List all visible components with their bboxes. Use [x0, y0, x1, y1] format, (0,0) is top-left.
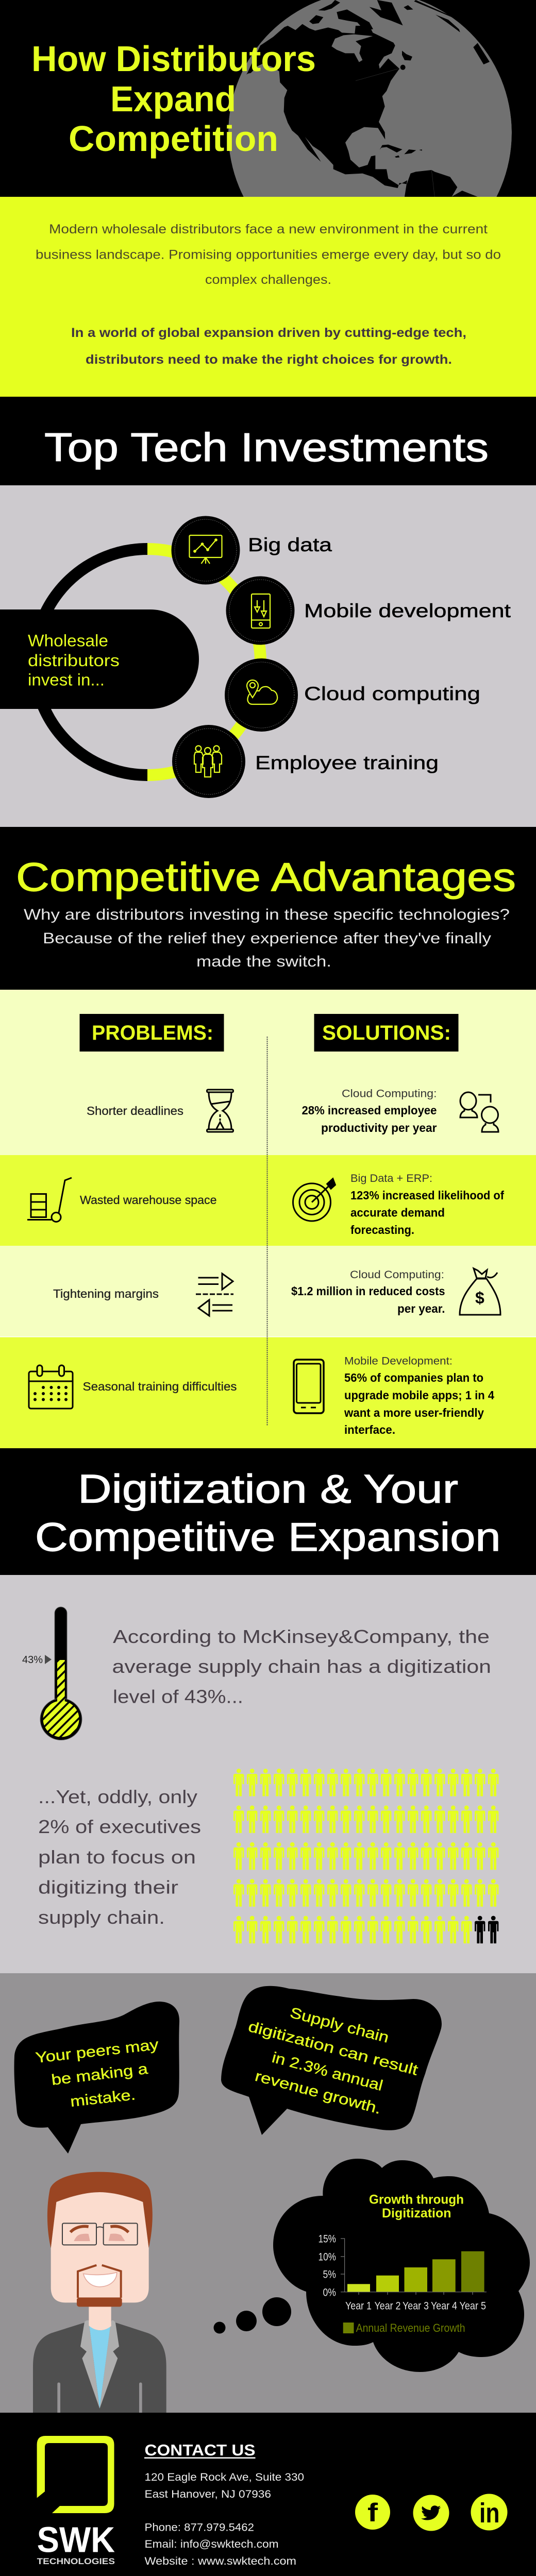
- icon: facebook: [355, 2495, 390, 2530]
- pictogram: 2 of 100 executives: [233, 1769, 499, 1944]
- chart title: Digitization: [382, 2206, 451, 2221]
- problem: wasted warehouse space: Wasted warehouse space: [80, 1193, 216, 1207]
- thought cloud with chart: [213, 2159, 530, 2372]
- character: man with glasses: [33, 2172, 166, 2413]
- title: How Distributors: [31, 39, 316, 79]
- panel: digitization stats: [0, 1575, 536, 1973]
- heading: Digitization and Your Competitive Expansion: Digitization & Your: [78, 1466, 458, 1512]
- speech bubble: revenue growth: digitization can result: [246, 2019, 420, 2079]
- icon: facebook: f: [367, 2498, 378, 2527]
- problem: tightening margins: Tightening margins: [53, 1287, 159, 1300]
- title: Expand: [110, 79, 236, 119]
- bar chart: annual revenue growth: 5%: [323, 2269, 336, 2281]
- center pill: Wholesale: [28, 632, 108, 650]
- badge: problems: [79, 1014, 224, 1052]
- contact details: Email: info@swktech.com: [144, 2538, 278, 2550]
- item: cloud computing: Cloud computing: [304, 683, 480, 704]
- intro emphasis: In a world of global expansion driven by cutting-edge tech,: [71, 326, 466, 340]
- solution: employee productivity: 28% increased employee: [302, 1104, 437, 1117]
- panel: problems and solutions: [0, 990, 536, 1448]
- icon: hand truck: [27, 1178, 72, 1222]
- problem: shorter deadlines: [87, 1090, 233, 1132]
- text: executives focus: [38, 1786, 201, 1928]
- icon: people exchange: [460, 1092, 498, 1132]
- subtitle: [24, 906, 510, 970]
- heading: Competitive Advantages: Competitive Advantages: [16, 854, 516, 900]
- subtitle: made the switch.: [196, 953, 331, 970]
- intro emphasis: distributors need to make the right choices for growth.: [86, 352, 452, 367]
- icon: linkedin: [471, 2494, 507, 2531]
- solution: demand forecasting: accurate demand: [350, 1206, 445, 1219]
- contact details: [144, 2471, 304, 2567]
- bar chart: annual revenue growth: 15%: [319, 2233, 336, 2245]
- speech bubble: revenue growth: revenue growth.: [253, 2068, 383, 2117]
- icon: linkedin: in: [479, 2498, 500, 2529]
- speech bubble: revenue growth: [221, 1986, 442, 2135]
- heading: Digitization and Your Competitive Expansion: [0, 1448, 536, 1575]
- text: executives focus: digitizing their: [38, 1876, 178, 1898]
- subtitle: Because of the relief they experience after they've finally: [43, 930, 491, 947]
- solution: reduced costs: $1.2 million in reduced costs: [291, 1284, 445, 1298]
- badge: solutions: [314, 1014, 459, 1052]
- panel: tech investments diagram: [0, 485, 536, 827]
- solution: demand forecasting: [293, 1173, 504, 1236]
- speech bubble: peers: Your peers may: [35, 2037, 160, 2066]
- solution: mobile apps: interface.: [344, 1423, 395, 1436]
- panel: intro text: [0, 197, 536, 397]
- speech bubble: revenue growth: Supply chain: [288, 2005, 391, 2046]
- title: [31, 39, 316, 159]
- speech bubble: peers: [14, 2002, 179, 2154]
- icon: twitter: [413, 2495, 449, 2531]
- heading: Top Tech Investments: Top Tech Investments: [44, 425, 489, 470]
- title: Competition: [69, 118, 278, 159]
- text: executives focus: plan to focus on: [38, 1846, 196, 1868]
- thermometer at 43 percent: 43%: [22, 1654, 43, 1666]
- bar chart: annual revenue growth: Year 3: [403, 2300, 429, 2312]
- heading: Top Tech Investments: [0, 397, 536, 485]
- text: McKinsey digitization level: According to McKinsey&Company, the: [113, 1626, 490, 1647]
- bar chart: annual revenue growth: Year 1: [345, 2300, 372, 2312]
- globe illustration: [228, 0, 512, 197]
- chart legend: Annual Revenue Growth: [356, 2321, 465, 2334]
- heading: Competitive Advantages: [0, 827, 536, 990]
- icon: opposing arrows: [196, 1274, 233, 1316]
- icon: phone with arrows: [252, 594, 270, 628]
- intro paragraph: business landscape. Promising opportunities emerge every day, but so do: [36, 247, 501, 262]
- text: executives focus: 2% of executives: [38, 1816, 201, 1837]
- chart title: Growth through: [369, 2193, 464, 2207]
- icon: money bag: $: [475, 1289, 484, 1307]
- solution: mobile apps: 56% of companies plan to: [344, 1371, 483, 1384]
- text: executives focus: supply chain.: [38, 1907, 165, 1928]
- item: mobile development: Mobile development: [304, 600, 511, 621]
- item: big data: [171, 516, 332, 584]
- panel: contact footer: [0, 2413, 536, 2576]
- bar chart: annual revenue growth: Year 2: [374, 2300, 401, 2312]
- chart title: [369, 2193, 464, 2221]
- bar chart: annual revenue growth: 10%: [319, 2251, 336, 2263]
- solution: mobile apps: [294, 1355, 494, 1436]
- logo: SWK Technologies: SWK: [37, 2519, 115, 2560]
- center pill: distributors: [28, 651, 120, 670]
- item: mobile development: [226, 576, 511, 645]
- solution: mobile apps: upgrade mobile apps; 1 in 4: [344, 1388, 494, 1402]
- problem: seasonal training: Seasonal training difficulties: [82, 1380, 237, 1393]
- badge: problems: PROBLEMS:: [92, 1022, 213, 1044]
- text: executives focus: ...Yet, oddly, only: [38, 1786, 197, 1807]
- solution: demand forecasting: Big Data + ERP:: [350, 1173, 432, 1184]
- icon: smartphone: [294, 1360, 324, 1413]
- icon: calendar: [29, 1365, 73, 1409]
- logo: SWK Technologies: [37, 2436, 115, 2566]
- solution: employee productivity: productivity per year: [321, 1121, 437, 1134]
- contact details: 120 Eagle Rock Ave, Suite 330: [144, 2471, 304, 2483]
- thermometer at 43 percent: [22, 1607, 82, 1740]
- text: McKinsey digitization level: average supply chain has a digitization: [112, 1656, 491, 1677]
- bar chart: annual revenue growth: 0%: [323, 2287, 336, 2299]
- item: big data: Big data: [248, 534, 332, 555]
- badge: solutions: SOLUTIONS:: [322, 1022, 451, 1044]
- icon: target with dart: [293, 1178, 336, 1221]
- bar chart: annual revenue growth: Year 5: [460, 2300, 486, 2312]
- icon: pin and cloud: [247, 680, 277, 704]
- solution: reduced costs: [291, 1268, 500, 1315]
- speech bubble: revenue growth: in 2.3% annual: [270, 2049, 384, 2094]
- heading: Digitization and Your Competitive Expansion: Competitive Expansion: [35, 1514, 501, 1560]
- solution: demand forecasting: forecasting.: [350, 1223, 414, 1236]
- panel: hero header: [0, 0, 536, 197]
- text: McKinsey digitization level: level of 43%...: [113, 1686, 243, 1707]
- panel: peers and growth: [0, 1973, 536, 2413]
- subtitle: Why are distributors investing in these specific technologies?: [24, 906, 510, 923]
- problem: seasonal training: [29, 1365, 237, 1409]
- intro emphasis: [71, 326, 466, 367]
- problem: shorter deadlines: Shorter deadlines: [87, 1104, 183, 1117]
- intro paragraph: [36, 222, 501, 287]
- solution: mobile apps: want a more user-friendly: [344, 1406, 484, 1419]
- contact details: Phone: 877.979.5462: [144, 2521, 254, 2534]
- solution: mobile apps: Mobile Development:: [344, 1355, 453, 1367]
- text: McKinsey digitization level: [112, 1626, 491, 1707]
- item: cloud computing: [225, 658, 480, 732]
- center pill: invest in...: [28, 671, 105, 689]
- intro paragraph: complex challenges.: [205, 273, 331, 287]
- contact details: Website : www.swktech.com: [144, 2555, 296, 2567]
- solution: demand forecasting: 123% increased likelihood of: [350, 1189, 504, 1202]
- icon: hourglass: [207, 1090, 233, 1132]
- solution: reduced costs: Cloud Computing:: [350, 1269, 444, 1281]
- icon: presentation chart: [190, 535, 222, 564]
- contact details: East Hanover, NJ 07936: [144, 2488, 271, 2500]
- center pill: [0, 609, 199, 709]
- speech bubble: peers: mistake.: [70, 2087, 137, 2110]
- bar chart: annual revenue growth: Year 4: [431, 2300, 457, 2312]
- bar chart: annual revenue growth: [319, 2233, 487, 2334]
- speech bubble: peers: be making a: [51, 2061, 149, 2089]
- icon: money bag: [460, 1268, 500, 1315]
- item: employee training: Employee training: [255, 752, 439, 773]
- problem: wasted warehouse space: [27, 1178, 216, 1222]
- ring: [35, 549, 261, 775]
- solution: employee productivity: [302, 1088, 498, 1134]
- solution: employee productivity: Cloud Computing:: [342, 1088, 437, 1099]
- solution: reduced costs: per year.: [397, 1302, 445, 1315]
- problem: tightening margins: [53, 1274, 233, 1316]
- icon: three employees: [194, 746, 222, 777]
- item: employee training: [172, 725, 439, 798]
- intro paragraph: Modern wholesale distributors face a new environment in the current: [49, 222, 488, 236]
- logo: SWK Technologies: TECHNOLOGIES: [37, 2556, 115, 2566]
- contact heading: CONTACT US: [144, 2441, 256, 2459]
